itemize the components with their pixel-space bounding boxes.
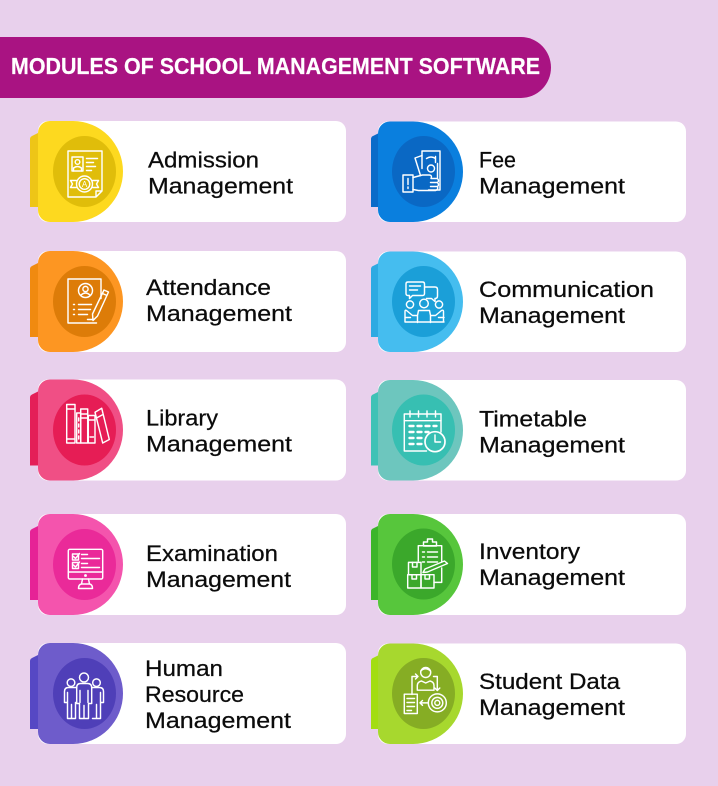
label: Management (148, 174, 294, 198)
icon: people talking (405, 282, 444, 322)
label: Management (479, 174, 626, 198)
label: Fee (479, 148, 516, 172)
panel: student data management (371, 644, 686, 744)
icon: group of people (64, 673, 104, 718)
icon: attendance sheet and pencil (68, 279, 108, 323)
icon: calendar and clock (404, 411, 445, 452)
title banner: MODULES OF SCHOOL MANAGEMENT SOFTWARE (11, 53, 540, 79)
label (479, 669, 626, 720)
label: Timetable (479, 406, 587, 432)
icon: clipboard, boxes and pencil (408, 539, 448, 588)
panel: examination management (30, 514, 346, 615)
label: Management (145, 708, 292, 733)
label (146, 541, 292, 592)
label: Attendance (146, 275, 271, 300)
panel: library management (30, 380, 346, 480)
panel: inventory management (371, 514, 686, 615)
panel: attendance management (30, 251, 346, 352)
label: Student Data (479, 669, 621, 694)
label (146, 406, 293, 456)
icon: admission form (68, 151, 102, 197)
label (146, 275, 293, 326)
title banner (0, 37, 551, 98)
label (479, 148, 626, 198)
icon: books (67, 404, 109, 443)
label: Admission (148, 148, 259, 172)
panel: admission management (30, 121, 346, 222)
label (479, 277, 654, 328)
label: Management (479, 432, 626, 458)
label (145, 656, 292, 733)
label: Management (146, 301, 293, 326)
label: Communication (479, 277, 654, 302)
panel: fee management (371, 122, 686, 222)
label: Inventory (479, 539, 581, 564)
panel: human resource management (30, 643, 346, 744)
label: Resource (145, 682, 244, 707)
label: Management (146, 567, 292, 592)
label: Management (146, 432, 293, 456)
panel: communication management (371, 252, 686, 352)
icon: student data cycle (404, 668, 446, 714)
label: Examination (146, 541, 278, 566)
label (479, 539, 626, 590)
label: Management (479, 565, 626, 590)
icon: online exam monitor (68, 549, 103, 588)
panel: timetable management (371, 380, 686, 480)
label: Library (146, 406, 219, 430)
icon: admission form: A (82, 180, 88, 189)
label: Management (479, 303, 626, 328)
label (479, 406, 626, 458)
label: Management (479, 695, 626, 720)
label: Human (145, 656, 223, 681)
label (148, 148, 294, 198)
icon: money in hand (403, 151, 440, 192)
